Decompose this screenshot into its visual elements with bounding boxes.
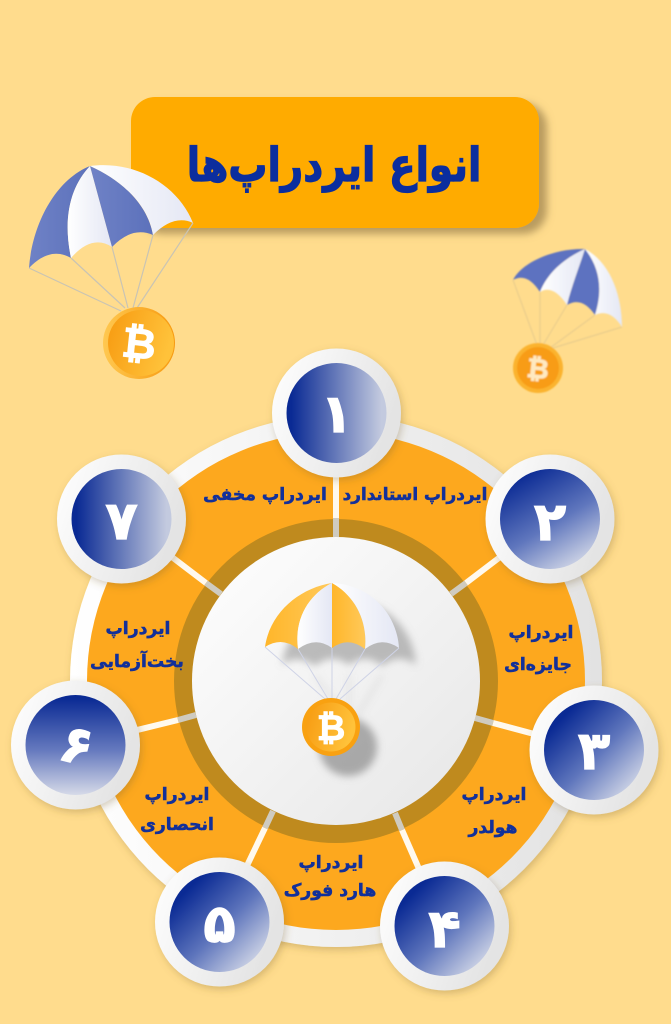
label: hidden airdrop: ایردراپ مخفی [203,485,327,505]
number badge 2: ۲ [534,492,566,553]
number badge 4 [380,862,509,990]
number badge 7 [57,454,186,584]
label: standard airdrop: ایردراپ استاندارد [343,484,487,505]
label: lottery airdrop second line: بخت‌آزمایی [90,650,184,672]
spokes [76,421,594,926]
number badge 4: ۴ [428,899,461,960]
icon: large blue parachute with bitcoin [29,165,193,379]
label: reward airdrop second line: جایزه‌ای [504,655,572,675]
icon: small blurred parachute with bitcoin [513,249,622,393]
label: holder airdrop: ایردراپ [462,785,526,805]
title: انواع ایردراپ‌ها [187,139,481,193]
label: exclusive airdrop second line: انحصاری [140,815,214,835]
number badge 1 [272,348,401,478]
segment labels [90,484,573,901]
label: exclusive airdrop: ایردراپ [145,785,209,805]
title banner [131,97,539,228]
number badge 6 [11,680,140,810]
label: hard fork airdrop: ایردراپ [299,853,363,873]
number badge 3: ۳ [578,721,610,782]
number badge 1: ۱ [320,384,353,445]
icon: center parachute with bitcoin: ₿ [317,709,345,749]
label: hard fork airdrop second line: هارد فورک [284,881,376,901]
number badge 3 [530,686,658,814]
label: lottery airdrop: ایردراپ [106,619,170,639]
icon: large blue parachute with bitcoin: ₿ [119,317,159,370]
center disc [192,537,480,825]
icon: center parachute with bitcoin [265,583,416,776]
number badge 5: ۵ [203,894,236,955]
number badge 6: ۶ [54,712,100,779]
number badge 7: ۷ [105,491,138,552]
label: holder airdrop second line: هولدر [468,818,517,838]
wheel base [70,415,602,947]
number badge 5 [155,858,284,986]
label: reward airdrop: ایردراپ [509,623,573,643]
icon: small blurred parachute with bitcoin: ₿ [525,353,550,386]
number badge 2 [486,454,614,584]
